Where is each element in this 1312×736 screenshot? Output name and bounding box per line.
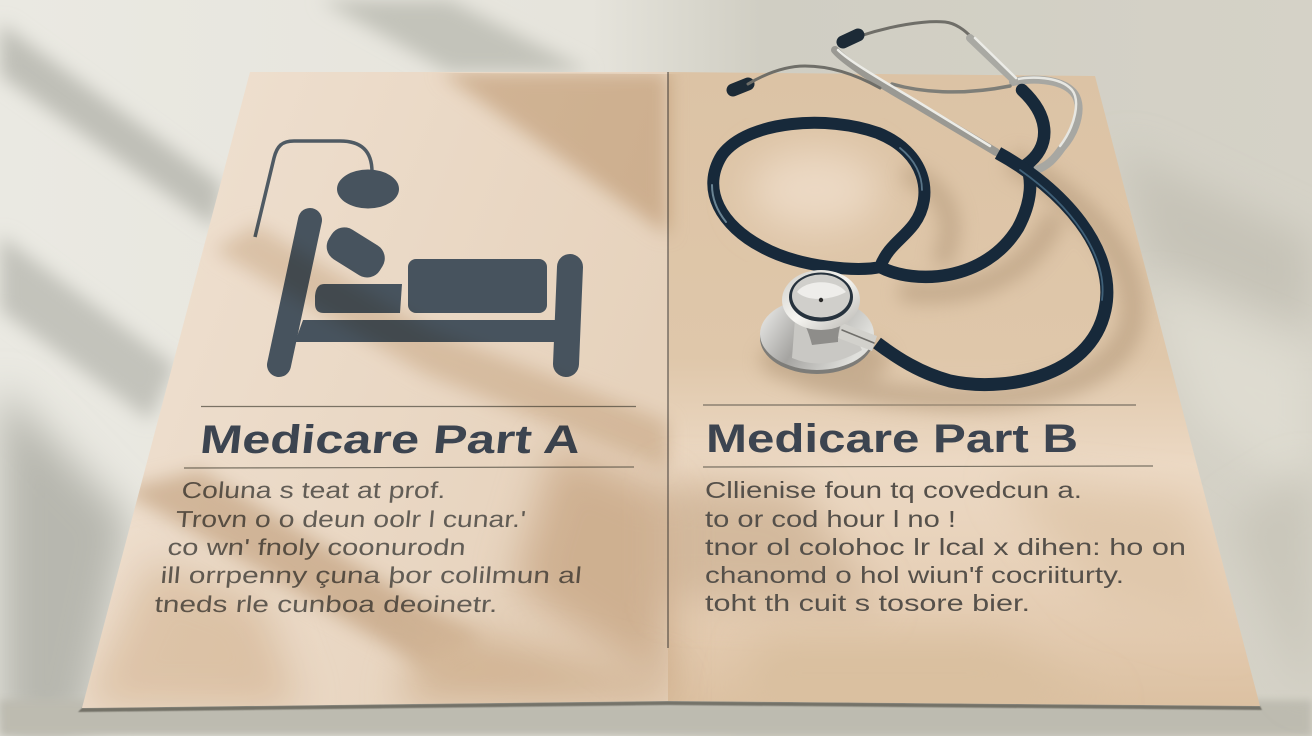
- text block: Part A body: [154, 477, 583, 617]
- icon part: bed frame: [279, 220, 570, 365]
- text block: Part B body: Cllienise foun tq covedcun a.: [705, 477, 1082, 503]
- text block: Part A body: Trovn o o deun oolr l cunar.': [175, 506, 527, 532]
- stethoscope: ear tube back: [860, 22, 1079, 170]
- text block: Part B body: [705, 477, 1186, 616]
- icon part: pillow: [315, 284, 402, 313]
- icon part: IV bag: [337, 170, 399, 208]
- stethoscope: [712, 22, 1107, 385]
- left page: [82, 72, 668, 708]
- left page light and shadow overlay: [82, 72, 668, 708]
- stethoscope: metal binaural: [748, 50, 996, 152]
- divider rules: Part A: [184, 406, 636, 468]
- icon: hospital bed with patient and IV: [255, 141, 570, 365]
- icon part: patient body: [408, 259, 547, 313]
- text block: Part A body: Coluna s teat at prof.: [181, 477, 447, 503]
- stethoscope: ear tips: [733, 35, 858, 90]
- divider rules: Part B: [703, 405, 1153, 467]
- stethoscope: main tube: [877, 153, 1107, 385]
- text block: Part B body: tnor ol colohoc lr lcal x dihen: ho on: [705, 534, 1186, 560]
- icon part: patient head: [321, 222, 390, 283]
- text block: Part A body: tneds rle cunboa deoinetr.: [154, 591, 499, 617]
- icon part: IV pole: [255, 141, 372, 237]
- stethoscope: tube loop: [712, 90, 1044, 277]
- stethoscope: chest piece: [760, 270, 877, 374]
- stethoscope shadow: [760, 160, 1133, 398]
- heading: Medicare Part B: Medicare Part B: [706, 417, 1078, 461]
- heading: Medicare Part A: Medicare Part A: [198, 418, 583, 462]
- text block: Part B body: toht th cuit s tosore bier.: [705, 590, 1030, 616]
- brochure sheet: [82, 72, 1260, 708]
- right page: [668, 72, 1260, 706]
- centre fold: [667, 72, 669, 648]
- text block: Part A body: ill orrpenny çuna þor colilmun al: [160, 562, 583, 588]
- text block: Part B body: chanomd o hol wiun'f cocriiturty.: [705, 562, 1124, 588]
- text block: Part B body: to or cod hour l no !: [705, 506, 956, 532]
- text block: Part A body: co wn' fnoly coonurodn: [167, 534, 467, 560]
- brochure sheet shadow: [78, 701, 1262, 712]
